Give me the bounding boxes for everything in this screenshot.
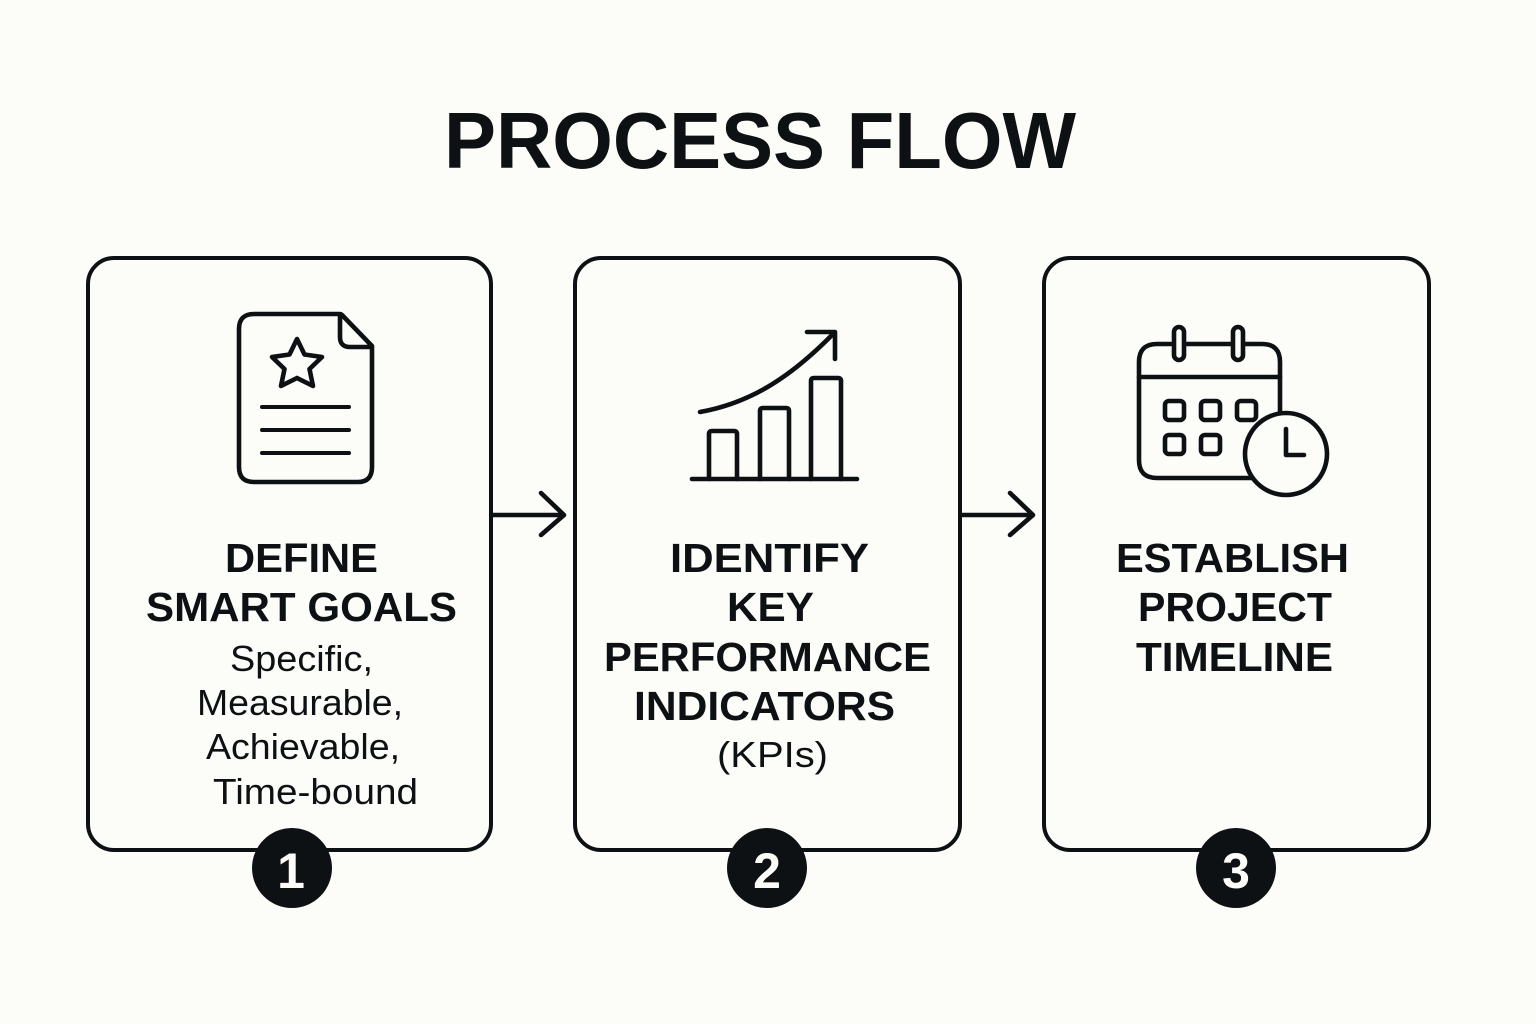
- description: smart criteria: Specific,: [230, 638, 373, 679]
- description: smart criteria: Time-bound: [213, 771, 418, 812]
- description: KPIs: (KPIs): [717, 734, 828, 775]
- card outline 3: [1044, 258, 1429, 850]
- number badge 1: [252, 828, 332, 908]
- heading: identify key performance indicators: [604, 535, 931, 729]
- number badge 2: [727, 828, 807, 908]
- icon: calendar with clock: [1139, 327, 1327, 495]
- heading: identify key performance indicators: IDENTIFY: [670, 535, 869, 581]
- number badge 2: 2: [753, 843, 781, 899]
- description: smart criteria: Measurable,: [197, 682, 403, 723]
- card outline 2: [575, 258, 960, 850]
- panel: identify KPIs: [575, 258, 960, 908]
- icon: document with star: [239, 314, 372, 482]
- heading: establish project timeline: ESTABLISH: [1116, 535, 1349, 581]
- panel: establish project timeline: [1044, 258, 1429, 908]
- heading: define smart goals: [146, 535, 457, 630]
- heading: identify key performance indicators: PERFORMANCE: [604, 634, 931, 680]
- heading: establish project timeline: [1116, 535, 1349, 680]
- card outline 1: [88, 258, 491, 850]
- heading: define smart goals: SMART GOALS: [146, 584, 457, 630]
- number badge 3: 3: [1222, 843, 1250, 899]
- heading: define smart goals: DEFINE: [225, 535, 378, 581]
- arrow: step 1 to 2: [492, 493, 564, 535]
- icon: growth bar chart: [692, 332, 857, 479]
- description: smart criteria: [197, 638, 418, 812]
- heading: identify key performance indicators: KEY: [727, 584, 814, 630]
- heading: establish project timeline: PROJECT: [1138, 584, 1332, 630]
- heading: identify key performance indicators: INDICATORS: [634, 683, 895, 729]
- number badge 3: [1196, 828, 1276, 908]
- arrow: step 2 to 3: [961, 493, 1033, 535]
- panel: define SMART goals: [88, 258, 491, 908]
- number badge 1: 1: [277, 843, 305, 899]
- title: PROCESS FLOW: [444, 96, 1076, 185]
- description: smart criteria: Achievable,: [206, 726, 400, 767]
- heading: establish project timeline: TIMELINE: [1136, 634, 1333, 680]
